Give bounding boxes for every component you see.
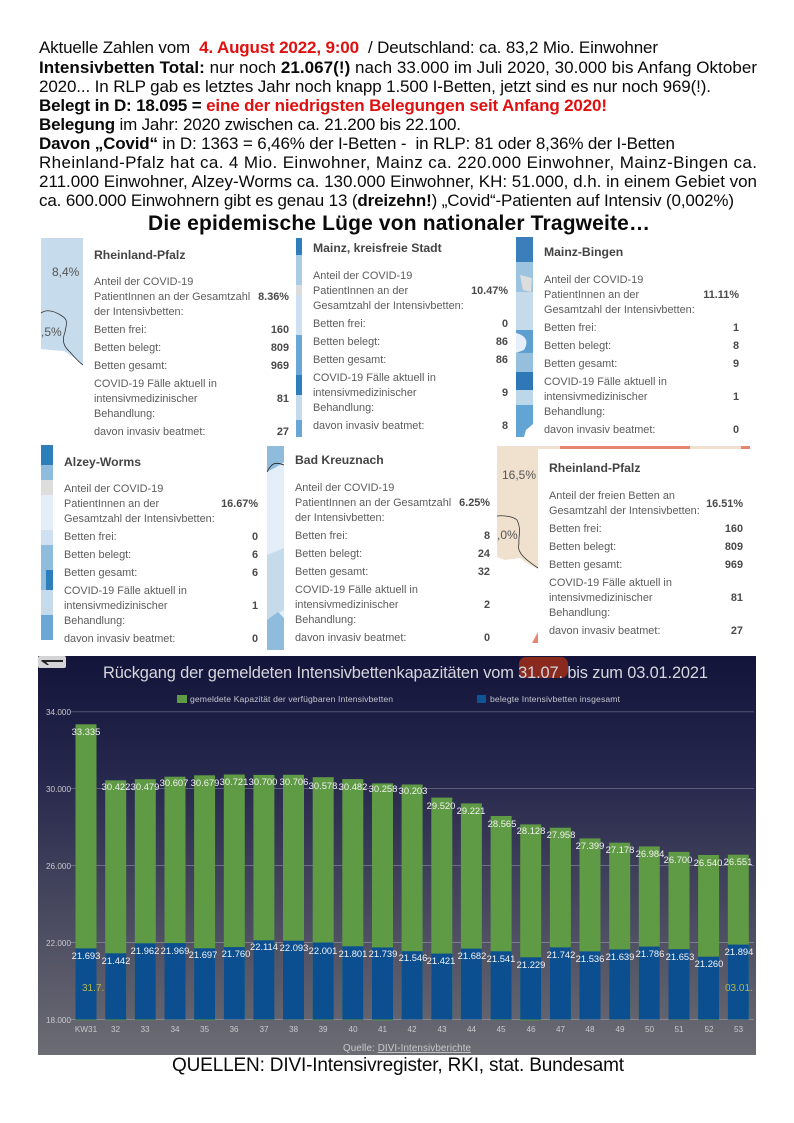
- capacity value labels: 30.700: [249, 776, 277, 787]
- text: Mainz: Betten gesamt:: [313, 354, 386, 366]
- intro text block: [39, 38, 757, 210]
- map fragment: Rheinland-Pfalz: [41, 238, 83, 365]
- text: Alzey-Worms: Betten frei:: [64, 531, 117, 543]
- occupied value labels: 21.546: [399, 952, 427, 963]
- text: free beds: Rheinland-Pfalz: [549, 461, 640, 475]
- occupied value labels: 21.421: [427, 955, 455, 966]
- text: Bad Kreuznach: davon invasiv beatmet:: [295, 632, 406, 644]
- text: Bad Kreuznach: Bad Kreuznach: [295, 453, 384, 467]
- x axis week labels: 37: [259, 1025, 269, 1034]
- x axis week labels: 36: [229, 1025, 239, 1034]
- y axis and grid lines: 34.000: [46, 708, 71, 717]
- x axis week labels: 44: [467, 1025, 476, 1034]
- text: Bad Kreuznach: 2: [484, 599, 490, 611]
- chart title: Rückgang der gemeldeten Intensivbettenkapazitäten vom 31.07. bis zum 03.01.2021: [103, 664, 708, 682]
- text: Mainz-Bingen: Betten gesamt:: [544, 358, 617, 370]
- occupied value labels: 22.001: [309, 945, 337, 956]
- text: Alzey-Worms: intensivmedizinischer: [64, 600, 168, 612]
- text: Rheinland-Pfalz: Rheinland-Pfalz: [94, 248, 185, 262]
- capacity value labels: 27.958: [547, 829, 575, 840]
- text: Bad Kreuznach: der Intensivbetten:: [295, 512, 385, 524]
- text: Mainz-Bingen: [544, 245, 739, 436]
- text: Rheinland-Pfalz: 81: [277, 393, 289, 405]
- text: Mainz-Bingen: 11.11%: [703, 289, 739, 301]
- panel: Rheinland-Pfalz free beds: [497, 446, 750, 643]
- capacity value labels: [72, 726, 752, 868]
- capacity value labels: 26.540: [694, 857, 722, 868]
- text: Bad Kreuznach: Anteil der COVID-19: [295, 482, 394, 494]
- intro text block: 211.000 Einwohner, Alzey-Worms ca. 130.000 Einwohner, KH: 51.000, d.h. in einem Gebiet von: [39, 172, 757, 191]
- text: Bad Kreuznach: 6.25%: [459, 497, 490, 509]
- occupied value labels: 21.739: [369, 948, 397, 959]
- map fragment: Bad Kreuznach: [267, 446, 284, 650]
- occupied value labels: 21.536: [576, 953, 604, 964]
- text: Alzey-Worms: 6: [252, 567, 258, 579]
- text: free beds: intensivmedizinischer: [549, 592, 653, 604]
- capacity value labels: 30.679: [191, 777, 219, 788]
- occupied value labels: 21.801: [339, 948, 367, 959]
- text: free beds: 969: [725, 559, 743, 571]
- text: Alzey-Worms: Behandlung:: [64, 615, 125, 627]
- text: Rheinland-Pfalz: PatientInnen an der Gesamtzahl: [94, 291, 250, 303]
- text: Mainz: Behandlung:: [313, 402, 374, 414]
- text: Rheinland-Pfalz: davon invasiv beatmet:: [94, 426, 205, 438]
- text: Mainz: COVID-19 Fälle aktuell in: [313, 372, 436, 384]
- text: Alzey-Worms: Gesamtzahl der Intensivbetten:: [64, 513, 215, 525]
- map fragment: Mainz-Bingen: [516, 237, 533, 437]
- text: Mainz: Anteil der COVID-19: [313, 270, 412, 282]
- text: Mainz: PatientInnen an der: [313, 285, 408, 297]
- text: Mainz-Bingen: Anteil der COVID-19: [544, 274, 643, 286]
- text: Rheinland-Pfalz: 27: [277, 426, 289, 438]
- occupied value labels: 21.693: [72, 950, 100, 961]
- occupied value labels: [72, 941, 753, 970]
- text: Rheinland-Pfalz: Betten belegt:: [94, 342, 161, 354]
- map fragment: Alzey-Worms: [41, 445, 53, 640]
- text: Mainz-Bingen: davon invasiv beatmet:: [544, 424, 655, 436]
- text: Bad Kreuznach: Betten gesamt:: [295, 566, 368, 578]
- text: Mainz-Bingen: 1: [733, 322, 739, 334]
- text: Mainz-Bingen: 0: [733, 424, 739, 436]
- capacity value labels: 30.479: [131, 781, 159, 792]
- capacity value labels: 28.565: [488, 818, 516, 829]
- x axis week labels: 45: [496, 1025, 506, 1034]
- text: Bad Kreuznach: Betten belegt:: [295, 548, 362, 560]
- text: free beds: COVID-19 Fälle aktuell in: [549, 577, 672, 589]
- text: free beds: 81: [731, 592, 743, 604]
- y axis and grid lines: [46, 708, 754, 1025]
- x axis week labels: 34: [170, 1025, 180, 1034]
- text: free beds: Betten belegt:: [549, 541, 616, 553]
- text: Mainz: Mainz, kreisfreie Stadt: [313, 241, 442, 255]
- text: Mainz-Bingen: Betten belegt:: [544, 340, 611, 352]
- occupied value labels: 22.093: [280, 942, 308, 953]
- text: Mainz: 86: [496, 354, 508, 366]
- text: free beds: Anteil der freien Betten an: [549, 490, 675, 502]
- date markers on bars: [82, 983, 753, 994]
- capacity value labels: 29.221: [457, 805, 485, 816]
- text: Mainz-Bingen: COVID-19 Fälle aktuell in: [544, 376, 667, 388]
- occupied value labels: 21.229: [517, 959, 545, 970]
- legend: belegte Intensivbetten insgesamt: [490, 694, 621, 704]
- panel: Alzey-Worms: [41, 445, 258, 645]
- text: Alzey-Worms: [64, 455, 258, 645]
- occupied value labels: 21.697: [189, 949, 217, 960]
- x axis week labels: 46: [526, 1025, 536, 1034]
- text: Bad Kreuznach: PatientInnen an der Gesamtzahl: [295, 497, 451, 509]
- text: Alzey-Worms: 6: [252, 549, 258, 561]
- text: Alzey-Worms: Betten belegt:: [64, 549, 131, 561]
- intro text block: Davon „Covid“ in D: 1363 = 6,46% der I-Betten - in RLP: 81 oder 8,36% der I-Betten: [39, 134, 675, 153]
- text: Rheinland-Pfalz: 809: [271, 342, 289, 354]
- text: Rheinland-Pfalz: 160: [271, 324, 289, 336]
- occupied value labels: 21.894: [725, 946, 753, 957]
- occupied value labels: 21.742: [547, 949, 575, 960]
- text: free beds: 160: [725, 523, 743, 535]
- text: Bad Kreuznach: 0: [484, 632, 490, 644]
- x axis week labels: 50: [645, 1025, 654, 1034]
- text: Bad Kreuznach: 8: [484, 530, 490, 542]
- text: Rheinland-Pfalz: der Intensivbetten:: [94, 306, 184, 318]
- text: free beds: [549, 461, 743, 637]
- x axis week labels: 43: [437, 1025, 447, 1034]
- text: Mainz-Bingen: Behandlung:: [544, 406, 605, 418]
- x axis week labels: 39: [318, 1025, 328, 1034]
- capacity value labels: 30.721: [220, 776, 248, 787]
- x axis week labels: 47: [556, 1025, 565, 1034]
- x axis week labels: 53: [734, 1025, 743, 1034]
- capacity value labels: 28.128: [517, 825, 545, 836]
- intro text block: 2020... In RLP gab es letztes Jahr noch knapp 1.500 I-Betten, jetzt sind es nur noch 969(!).: [39, 77, 711, 96]
- text: Mainz: davon invasiv beatmet:: [313, 420, 424, 432]
- text: Alzey-Worms: davon invasiv beatmet:: [64, 633, 175, 645]
- intro text block: Belegung im Jahr: 2020 zwischen ca. 21.200 bis 22.100.: [39, 115, 461, 134]
- panel: Mainz, kreisfreie Stadt: [296, 238, 508, 437]
- map fragment: Rheinland-Pfalz: 8,4%: [52, 265, 80, 279]
- text: Bad Kreuznach: intensivmedizinischer: [295, 599, 399, 611]
- capacity value labels: 30.422: [102, 781, 130, 792]
- text: free beds: Gesamtzahl der Intensivbetten:: [549, 505, 700, 517]
- text: free beds: Betten gesamt:: [549, 559, 622, 571]
- text: Rheinland-Pfalz: COVID-19 Fälle aktuell in: [94, 378, 217, 390]
- y axis and grid lines: 26.000: [46, 862, 71, 871]
- text: Mainz-Bingen: 8: [733, 340, 739, 352]
- icon: back arrow key: [38, 656, 66, 668]
- text: Alzey-Worms: Anteil der COVID-19: [64, 483, 163, 495]
- text: Mainz: 10.47%: [471, 285, 508, 297]
- capacity value labels: 30.258: [369, 783, 397, 794]
- text: Rheinland-Pfalz: 969: [271, 360, 289, 372]
- text: Rheinland-Pfalz: intensivmedizinischer: [94, 393, 198, 405]
- map fragment: Mainz: [296, 238, 302, 437]
- text: Mainz-Bingen: Betten frei:: [544, 322, 597, 334]
- occupied value labels: 21.969: [161, 945, 189, 956]
- text: Mainz-Bingen: Gesamtzahl der Intensivbetten:: [544, 304, 695, 316]
- text: Alzey-Worms: Alzey-Worms: [64, 455, 141, 469]
- capacity value labels: 30.607: [160, 777, 188, 788]
- text: free beds: Behandlung:: [549, 607, 610, 619]
- text: Alzey-Worms: 1: [252, 600, 258, 612]
- text: Rheinland-Pfalz: 8.36%: [258, 291, 289, 303]
- text: Mainz: 8: [502, 420, 508, 432]
- capacity value labels: 29.520: [427, 800, 455, 811]
- occupied value labels: 22.114: [250, 941, 278, 952]
- text: Mainz-Bingen: Mainz-Bingen: [544, 245, 623, 259]
- date markers on bars: 03.01.: [725, 983, 753, 994]
- x axis week labels: KW31: [75, 1025, 98, 1034]
- capacity value labels: 27.399: [576, 840, 604, 851]
- text: Mainz: Betten belegt:: [313, 336, 380, 348]
- text: Bad Kreuznach: 24: [478, 548, 490, 560]
- text: Alzey-Worms: 0: [252, 531, 258, 543]
- x axis week labels: 48: [585, 1025, 595, 1034]
- map fragment: free beds: [497, 446, 750, 643]
- panel: Rheinland-Pfalz COVID share: [41, 238, 289, 438]
- text: Mainz: [313, 241, 508, 432]
- occupied value labels: 21.541: [487, 953, 515, 964]
- occupied value labels: 21.442: [102, 955, 130, 966]
- text: Bad Kreuznach: Behandlung:: [295, 614, 356, 626]
- x axis week labels: 38: [289, 1025, 298, 1034]
- text: Mainz-Bingen: PatientInnen an der: [544, 289, 639, 301]
- text: Mainz: Betten frei:: [313, 318, 366, 330]
- x axis week labels: 40: [348, 1025, 358, 1034]
- x axis week labels: 35: [200, 1025, 209, 1034]
- green bars: reported capacity: [76, 724, 749, 1020]
- text: Rheinland-Pfalz: Anteil der COVID-19: [94, 276, 193, 288]
- text: Mainz: Gesamtzahl der Intensivbetten:: [313, 300, 464, 312]
- capacity value labels: 30.706: [280, 776, 308, 787]
- text: Rheinland-Pfalz: Betten gesamt:: [94, 360, 167, 372]
- chart source: Quelle: DIVI-Intensivberichte: [343, 1043, 472, 1054]
- occupied value labels: 21.260: [695, 958, 723, 969]
- occupied value labels: 21.653: [666, 951, 694, 962]
- x axis week labels: 32: [111, 1025, 120, 1034]
- text: free beds: 27: [731, 625, 743, 637]
- y axis and grid lines: 22.000: [46, 939, 71, 948]
- x axis week labels: 51: [674, 1025, 684, 1034]
- text: Mainz: intensivmedizinischer: [313, 387, 417, 399]
- text: Bad Kreuznach: Betten frei:: [295, 530, 348, 542]
- intro text block: Aktuelle Zahlen vom 4. August 2022, 9:00 / Deutschland: ca. 83,2 Mio. Einwohner: [39, 38, 658, 57]
- intro text block: Rheinland-Pfalz hat ca. 4 Mio. Einwohner, Mainz ca. 220.000 Einwohner, Mainz-Bingen ca.: [39, 153, 757, 172]
- text: Mainz-Bingen: intensivmedizinischer: [544, 391, 648, 403]
- text: Mainz: 0: [502, 318, 508, 330]
- legend: gemeldete Kapazität der verfügbaren Intensivbetten: [190, 694, 393, 704]
- text: free beds: 16.51%: [706, 498, 743, 510]
- intro text block: Intensivbetten Total: nur noch 21.067(!) nach 33.000 im Juli 2020, 30.000 bis Anfang Oktober: [39, 58, 757, 77]
- capacity value labels: 27.178: [606, 844, 634, 855]
- y axis and grid lines: 18.000: [46, 1016, 71, 1025]
- text: free beds: davon invasiv beatmet:: [549, 625, 660, 637]
- x axis week labels: [75, 1025, 743, 1034]
- text: Rheinland-Pfalz: [94, 248, 289, 438]
- occupied value labels: 21.682: [458, 950, 486, 961]
- sources footer: QUELLEN: DIVI-Intensivregister, RKI, stat. Bundesamt: [172, 1055, 625, 1076]
- text: Alzey-Worms: PatientInnen an der: [64, 498, 159, 510]
- text: Alzey-Worms: 16.67%: [221, 498, 258, 510]
- capacity value labels: 30.203: [399, 785, 427, 796]
- capacity value labels: 30.482: [339, 781, 367, 792]
- text: Mainz-Bingen: 9: [733, 358, 739, 370]
- occupied value labels: 21.962: [131, 945, 159, 956]
- heading: Die epidemische Lüge von nationaler Tragweite…: [148, 212, 650, 235]
- x axis week labels: 49: [615, 1025, 625, 1034]
- y axis and grid lines: 30.000: [46, 785, 71, 794]
- text: free beds: Betten frei:: [549, 523, 602, 535]
- map fragment: Rheinland-Pfalz: ,5%: [41, 325, 62, 339]
- blue bars: occupied beds: [76, 940, 749, 1020]
- text: Mainz-Bingen: 1: [733, 391, 739, 403]
- occupied value labels: 21.639: [606, 951, 634, 962]
- chart panel: ICU capacity decline: [38, 656, 756, 1055]
- intro text block: Belegt in D: 18.095 = eine der niedrigsten Belegungen seit Anfang 2020!: [39, 96, 607, 115]
- occupied value labels: 21.786: [636, 948, 664, 959]
- legend: [177, 694, 621, 704]
- panel: Bad Kreuznach: [267, 446, 490, 650]
- text: Mainz: 86: [496, 336, 508, 348]
- text: Rheinland-Pfalz: Behandlung:: [94, 408, 155, 420]
- map fragment: free beds: ,0%: [497, 528, 518, 542]
- text: free beds: 809: [725, 541, 743, 553]
- intro text block: ca. 600.000 Einwohnern gibt es genau 13 (dreizehn!) „Covid“-Patienten auf Intensiv (0,002%): [39, 191, 734, 210]
- capacity value labels: 30.578: [309, 780, 337, 791]
- text: Bad Kreuznach: 32: [478, 566, 490, 578]
- text: Mainz: 9: [502, 387, 508, 399]
- x axis week labels: 41: [378, 1025, 387, 1034]
- text: Alzey-Worms: Betten gesamt:: [64, 567, 137, 579]
- map fragment: free beds: 16,5%: [502, 468, 536, 482]
- occupied value labels: 21.760: [222, 948, 250, 959]
- capacity value labels: 26.551: [724, 856, 752, 867]
- x axis week labels: 33: [140, 1025, 150, 1034]
- text: Bad Kreuznach: [295, 453, 490, 644]
- panel: Mainz-Bingen: [516, 237, 739, 437]
- text: Alzey-Worms: COVID-19 Fälle aktuell in: [64, 585, 187, 597]
- text: Rheinland-Pfalz: Betten frei:: [94, 324, 147, 336]
- date markers on bars: 31.7.: [82, 983, 104, 994]
- capacity value labels: 33.335: [72, 726, 100, 737]
- capacity value labels: 26.984: [636, 848, 664, 859]
- text: Bad Kreuznach: COVID-19 Fälle aktuell in: [295, 584, 418, 596]
- x axis week labels: 42: [407, 1025, 417, 1034]
- text: Alzey-Worms: 0: [252, 633, 258, 645]
- capacity value labels: 26.700: [664, 854, 692, 865]
- x axis week labels: 52: [704, 1025, 714, 1034]
